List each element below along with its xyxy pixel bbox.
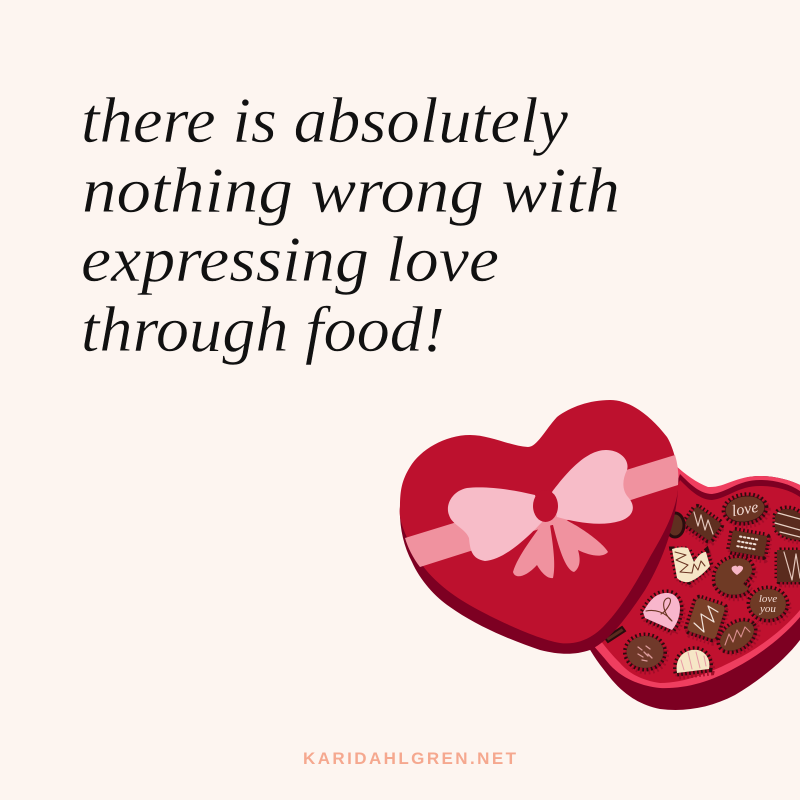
chocolate: striped bar (684, 506, 722, 541)
illustration: heart-shaped chocolate box (400, 400, 800, 710)
chocolate: white half dome (677, 650, 709, 673)
chocolate: pink swirl (643, 593, 680, 630)
chocolate: love you oval: you (759, 603, 776, 615)
bow tails (513, 516, 608, 578)
title quote: expressing love (81, 224, 499, 296)
chocolate: love you oval (750, 589, 786, 619)
box base (585, 466, 800, 710)
bow right loop (552, 450, 633, 524)
lid face (400, 400, 678, 643)
chocolate: love you oval: love (759, 593, 777, 605)
chocolate: partly hidden by lid (666, 513, 684, 537)
chocolate: square with zigzag (686, 597, 726, 640)
chocolate: sliver by the lid (605, 627, 625, 642)
chocolate: caramel with pink heart (715, 558, 752, 595)
chocolate: sprinkled rectangle (729, 530, 767, 557)
chocolate: love oval (723, 493, 767, 525)
lid side shadow (400, 490, 678, 654)
bow knot (533, 490, 558, 522)
chocolate: oval with pink zigzag (715, 615, 759, 657)
chocolate: love oval: love (730, 499, 760, 520)
lid ribbon band (405, 455, 678, 567)
chocolate: striped heart (775, 509, 800, 540)
footer website: KARIDAHLGREN.NET (303, 749, 517, 768)
title quote: through food! (81, 294, 445, 366)
title quote: there is absolutely (81, 85, 568, 157)
bow left loop (448, 487, 542, 561)
chocolate: round with sprinkles (626, 636, 664, 668)
chocolate: white V shape (672, 547, 710, 582)
chocolate: striped square (777, 550, 800, 582)
title quote (81, 85, 620, 366)
title quote: nothing wrong with (82, 155, 620, 227)
